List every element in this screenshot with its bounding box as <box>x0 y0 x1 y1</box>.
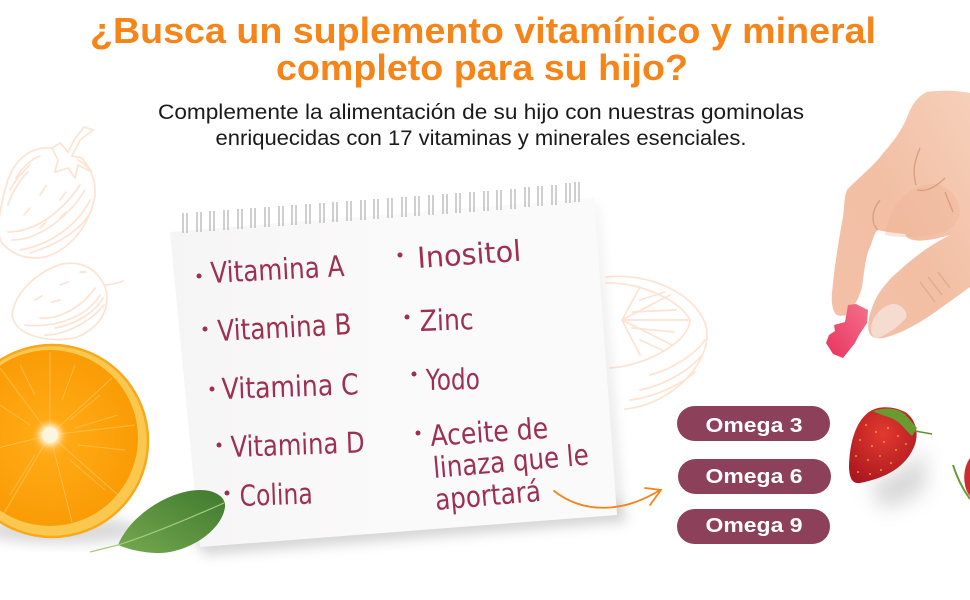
orange <box>0 345 148 544</box>
arrow <box>554 488 661 508</box>
handwritten list: right column: Inositol <box>416 234 522 275</box>
pill: Omega 6: Omega 6 <box>706 466 802 488</box>
handwritten list: right column: Aceite de <box>429 411 549 453</box>
omega pills <box>677 406 831 544</box>
handwritten list: right column: aportará <box>434 474 542 517</box>
hand holding gummy <box>826 91 970 358</box>
title: ¿Busca un suplemento vitamínico y mineral <box>90 10 876 51</box>
curled fingers shading <box>885 184 960 237</box>
subtitle text <box>158 101 804 150</box>
handwritten list: right column <box>398 234 590 517</box>
thumbnail <box>871 304 906 338</box>
handwritten list: left column: Vitamina B <box>217 307 352 348</box>
sketch: orange half <box>606 276 707 409</box>
pill: Omega 9: Omega 9 <box>706 515 802 537</box>
handwritten list: left column: Colina <box>239 476 313 513</box>
handwritten list: right column: Yodo <box>425 362 480 397</box>
strawberry partial at right edge <box>953 458 970 499</box>
handwritten list: left column: Vitamina C <box>221 367 359 406</box>
leaf <box>90 490 225 553</box>
notebook spiral rings <box>183 182 579 233</box>
sketch: strawberry <box>0 127 95 258</box>
subtitle text: enriquecidas con 17 vitaminas y minerales esenciales. <box>216 127 746 150</box>
handwritten list: left column: Vitamina D <box>230 425 365 464</box>
title: completo para su hijo? <box>276 47 688 88</box>
pill: Omega 9 <box>677 509 830 544</box>
subtitle text: Complemente la alimentación de su hijo con nuestras gominolas <box>158 101 804 124</box>
notebook <box>170 182 628 555</box>
pill: Omega 3: Omega 3 <box>706 415 802 437</box>
sketch: fruit <box>12 263 123 339</box>
handwritten list: right column: Zinc <box>419 302 474 338</box>
strawberry <box>849 407 932 510</box>
handwritten list: right column: linaza que le <box>432 438 590 485</box>
pill: Omega 6 <box>678 459 831 494</box>
handwritten list: left column: Vitamina A <box>210 249 345 290</box>
title <box>90 10 876 88</box>
gummy bear <box>826 304 868 358</box>
pill: Omega 3 <box>677 406 830 441</box>
handwritten list: left column <box>196 249 365 513</box>
